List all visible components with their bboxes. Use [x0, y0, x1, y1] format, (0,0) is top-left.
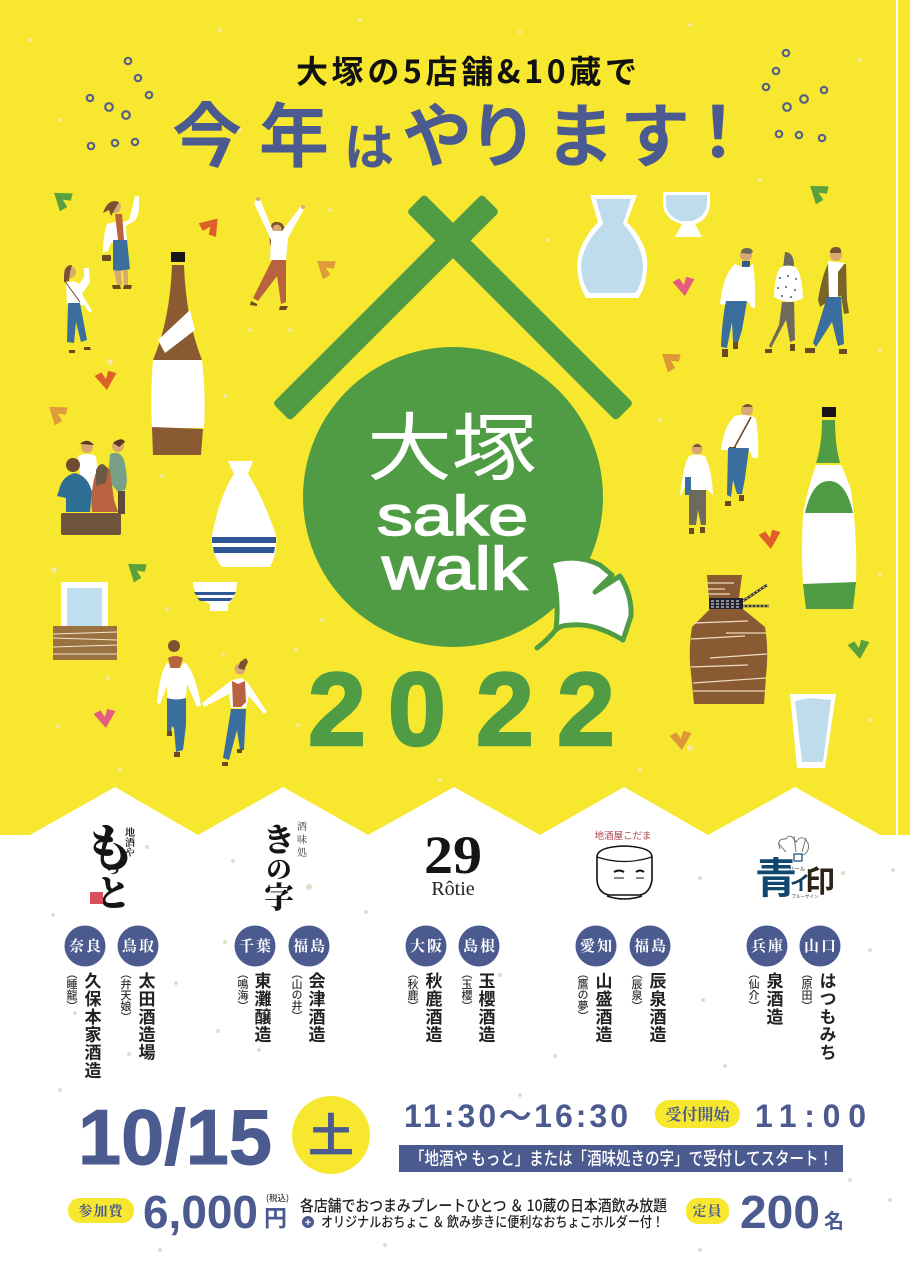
logo: jizake-ya motto — [85, 809, 138, 917]
fee amount: 円 — [264, 1199, 287, 1233]
icon: ginkgo leaf mustard right — [655, 345, 684, 374]
brewery column: Yamaguchi: はつもみち — [816, 972, 840, 1062]
heading: main title: ま — [545, 81, 615, 182]
brewery column: Osaka: 秋鹿酒造 — [422, 972, 446, 1044]
icon: ginkgo leaf mustard lower — [669, 730, 693, 751]
icon: top right cup — [663, 192, 710, 237]
brewery column: Osaka — [405, 926, 446, 1044]
brewery column: Yamaguchi: 山口 — [804, 935, 838, 956]
icon: ginkgo leaf pink — [93, 708, 117, 729]
heading: subtitle: 大塚の5店舗&10蔵で — [296, 47, 637, 93]
logo: shumidokoro ki-no-ji: 酒味処 — [294, 821, 310, 860]
logo: 29 Rotie: Rôtie — [431, 878, 475, 900]
logo: jizake-ya motto: も — [85, 809, 135, 881]
brewery column: Shimane: 玉櫻酒造 — [474, 972, 500, 1044]
logo: shumidokoro ki-no-ji — [263, 815, 310, 917]
icon: ginkgo leaf green top left — [47, 184, 76, 213]
capacity pill: 定員 — [692, 1201, 722, 1221]
brewery column: Osaka: （秋鹿） — [405, 973, 421, 1006]
fee amount: 6,000 — [143, 1186, 258, 1238]
icon: brown jar with rope — [690, 575, 769, 704]
icon: ginkgo leaf red 2 — [94, 370, 118, 391]
person: man in white with grey trousers — [680, 444, 713, 534]
heading: main title: 年 — [259, 81, 329, 182]
icon: ginkgo leaf green top right — [803, 177, 832, 206]
person: man in olive jacket — [805, 247, 849, 354]
logo: 29 Rotie: 29 — [424, 825, 482, 885]
logo: shumidokoro ki-no-ji: 字 — [264, 873, 294, 917]
reception pill: 受付開始 — [665, 1102, 731, 1125]
brewery column: Chiba: （鳴海） — [235, 973, 251, 1006]
person: man in cap — [720, 248, 755, 357]
logo: ginkgo leaf — [537, 558, 631, 648]
logo: green circle with name: 大塚 — [367, 389, 537, 496]
included food and drink: 各店舗でおつまみプレートひとつ ＆ 10蔵の日本酒飲み放題 — [300, 1194, 667, 1216]
decoration: right rings — [763, 50, 827, 141]
brewery column: Nara — [64, 926, 106, 1079]
logo: bar aoi shirushi: イ — [790, 867, 810, 896]
person: woman jumping — [250, 197, 305, 310]
fee amount: (税込) — [266, 1192, 289, 1204]
brewery column: Hyogo: 泉酒造 — [762, 971, 788, 1026]
fee pill — [68, 1198, 134, 1223]
included extras: + — [305, 1217, 311, 1229]
icon: tall glass — [790, 694, 836, 768]
logo: green circle with name: walk — [381, 535, 528, 602]
decoration: left rings — [87, 58, 152, 149]
event time: 11:30～16:30 — [404, 1098, 628, 1134]
brewery column: Fukushima 2: 福島 — [634, 935, 668, 956]
person: woman with bag waving — [102, 196, 139, 289]
logo: jizake-ya motto: と — [95, 866, 131, 917]
capacity number: 200 — [740, 1186, 820, 1238]
brewery column: Fukushima: 福島 — [293, 935, 327, 956]
brewery column: Hyogo: （仙介） — [746, 973, 762, 1006]
white right frame line — [896, 0, 898, 835]
icon: ginkgo leaf green lower — [121, 555, 150, 584]
brewery column: Aichi: 愛知 — [580, 935, 614, 956]
logo: jizake-ya motto: 地酒や — [122, 826, 138, 857]
icon: blue tokkuri — [577, 195, 647, 298]
heading: main title: り — [468, 81, 538, 182]
person: man with crossbody bag — [721, 404, 758, 506]
white zigzag lower panel — [0, 787, 910, 1277]
brewery column: Fukushima 2 — [629, 926, 670, 1044]
brewery column: Chiba: 千葉 — [239, 935, 273, 956]
heading: main title: は — [344, 108, 394, 180]
brewery column: Fukushima: 会津酒造 — [304, 972, 330, 1044]
icon: white tokkuri with stripes — [212, 461, 276, 567]
heading: main title: 今 — [172, 81, 242, 182]
brewery column: Nara: 奈良 — [69, 935, 103, 956]
person: woman with shoulder strap — [64, 265, 92, 353]
brewery column: Shimane: 島根 — [463, 935, 497, 956]
brewery column: Fukushima 2: 辰泉酒造 — [646, 972, 670, 1044]
brewery column: Aichi: 山盛酒造 — [592, 972, 616, 1044]
reception time: 11:00 — [755, 1098, 866, 1134]
person: couple holding hands — [157, 640, 267, 766]
year 2022: 2 — [308, 652, 366, 768]
year 2022: 2 — [476, 652, 534, 768]
weekday badge: 土 — [308, 1100, 354, 1166]
person: woman in dotted sweater — [765, 252, 803, 353]
capacity number: 名 — [824, 1205, 844, 1234]
brewery column: Yamaguchi — [799, 926, 840, 1062]
brewery column: Aichi: （鷹の夢） — [575, 973, 591, 1016]
icon: brown sake bottle — [151, 252, 205, 455]
logo: green circle with name: sake — [377, 484, 528, 547]
logo: shumidokoro ki-no-ji: の — [266, 850, 292, 886]
brewery column: Osaka: 大阪 — [410, 935, 444, 956]
brewery column: Fukushima — [288, 926, 330, 1044]
brewery column: Fukushima: （山の井） — [289, 973, 305, 1016]
icon: ginkgo leaf orange — [310, 252, 339, 281]
logo: shumidokoro ki-no-ji: き — [263, 815, 295, 861]
brewery column: Nara: （睡龍） — [64, 973, 80, 1006]
brewery column: Aichi — [575, 926, 616, 1044]
icon: ginkgo leaf pink right — [672, 276, 696, 297]
heading: main title: す — [620, 81, 690, 182]
heading: main title: や — [402, 81, 472, 182]
brewery column: Shimane — [458, 926, 500, 1044]
fee pill: 参加費 — [78, 1201, 124, 1221]
logo: bar aoi shirushi: バール — [789, 865, 806, 873]
icon: small sake cup — [193, 582, 237, 611]
logo: house roof — [273, 194, 633, 421]
year 2022: 0 — [388, 652, 446, 768]
icon: green sake bottle — [802, 407, 856, 609]
icon: ginkgo leaf red right — [758, 529, 782, 550]
brewery column: Tottori: （弁天娘） — [118, 973, 134, 1017]
brewery column: Hyogo: 兵庫 — [751, 935, 785, 956]
capacity pill — [686, 1198, 729, 1224]
weekday badge — [292, 1096, 370, 1174]
brewery column: Fukushima 2: （辰泉） — [629, 973, 645, 1006]
people: seated group — [57, 439, 127, 535]
year 2022: 2 — [557, 652, 615, 768]
logo: jizake-ya kodama — [595, 828, 652, 899]
brewery column: Nara: 久保本家酒造 — [80, 972, 106, 1079]
brewery column: Tottori: 鳥取 — [122, 935, 156, 956]
brewery column: Yamaguchi: （原田） — [799, 973, 815, 1006]
brewery column: Chiba: 東灘醸造 — [250, 972, 276, 1044]
icon: ginkgo leaf mustard left — [42, 398, 71, 427]
date: 10/15 — [78, 1093, 272, 1181]
logo: bar aoi shirushi: ブルーサイン — [792, 893, 819, 900]
heading: main title: ！ — [683, 77, 753, 178]
brewery column: Chiba — [234, 926, 276, 1044]
brewery column: Tottori: 太田酒造場 — [134, 972, 160, 1062]
logo: bar aoi shirushi: 青 — [755, 845, 797, 906]
reception pill — [655, 1100, 740, 1128]
included extras: オリジナルおちょこ ＆ 飲み歩きに便利なおちょこホルダー付！ — [321, 1212, 664, 1232]
icon: glass in wooden box — [53, 582, 117, 660]
brewery column: Tottori — [118, 926, 160, 1062]
logo: bar aoi shirushi — [755, 836, 835, 906]
brewery column: Hyogo — [746, 926, 788, 1026]
logo: jizake-ya kodama: 地酒屋こだま — [595, 828, 651, 842]
icon: ginkgo leaf green right — [847, 639, 871, 660]
icon: ginkgo leaf red — [197, 211, 226, 240]
brewery column: Shimane: （玉櫻） — [459, 973, 475, 1006]
logo: green circle with name — [303, 347, 603, 647]
logo: jizake-ya motto: っ — [105, 856, 121, 879]
logo: bar aoi shirushi: 印 — [805, 857, 835, 901]
